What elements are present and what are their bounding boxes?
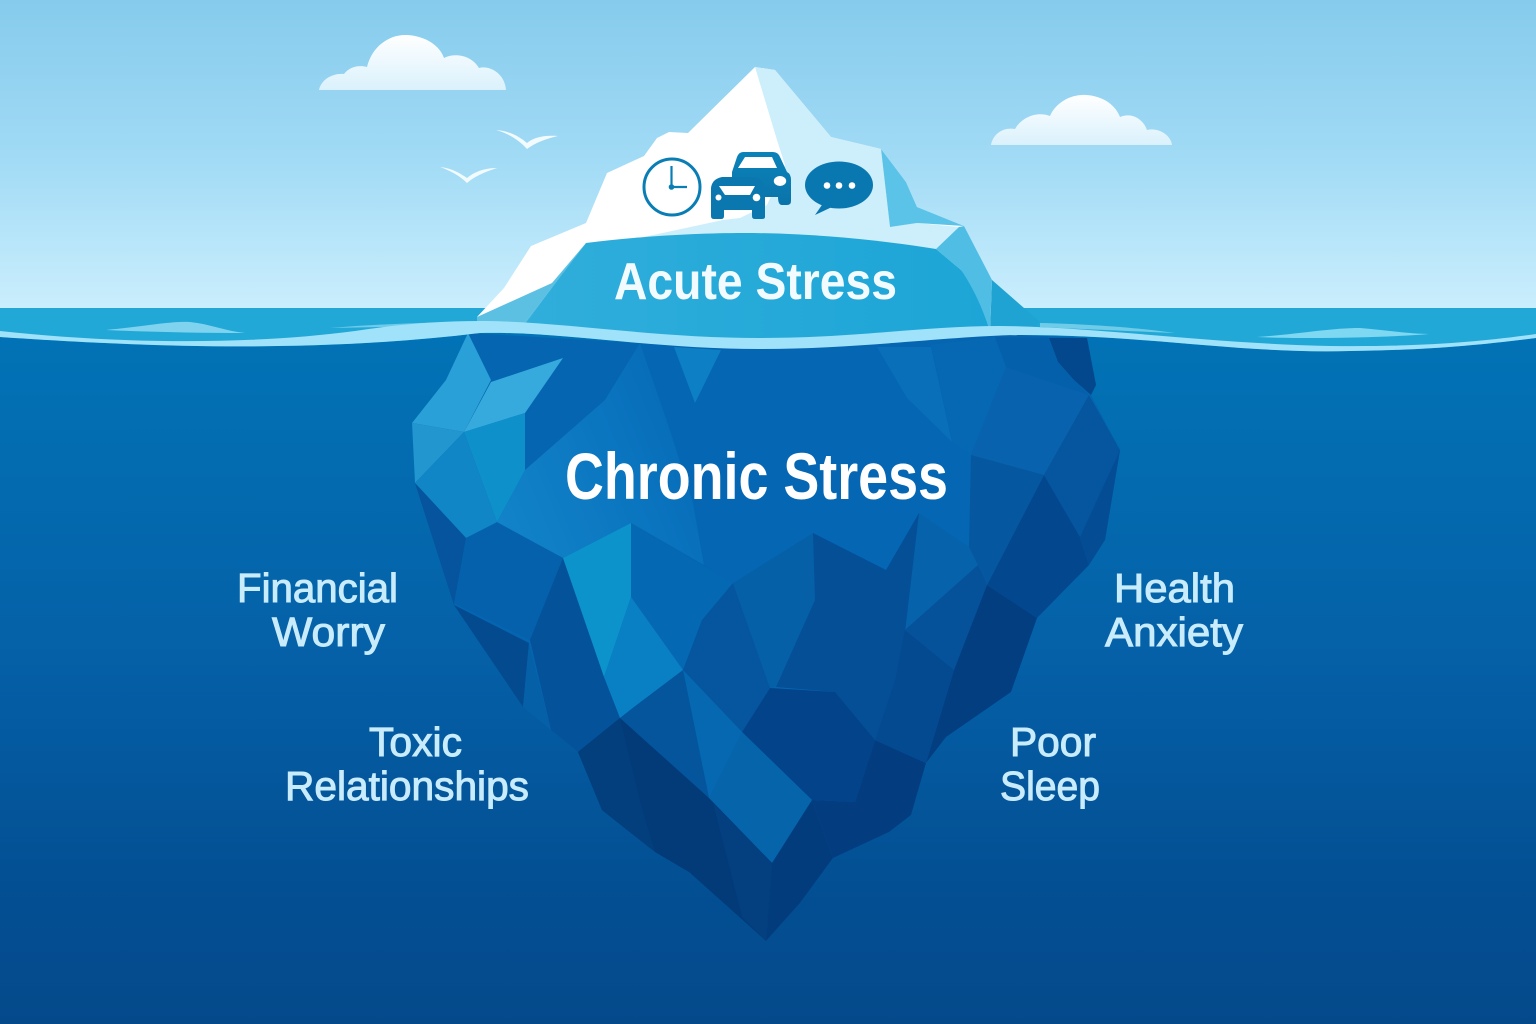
sea surface [0, 308, 1536, 356]
label: Toxic Relationships: Relationships [285, 763, 529, 809]
label: Health Anxiety: Anxiety [1105, 609, 1244, 655]
label: Financial Worry [237, 565, 398, 655]
deep ocean [0, 333, 1536, 1024]
back car [732, 152, 791, 210]
cloud: right [991, 95, 1172, 145]
label: Poor Sleep: Poor [1010, 719, 1096, 765]
waterline wave [0, 321, 1536, 351]
label: Health Anxiety [1105, 565, 1244, 655]
front car [711, 177, 765, 219]
iceberg: submerged body [412, 333, 1120, 941]
iceberg tip [477, 67, 1040, 343]
label: Health Anxiety: Health [1114, 565, 1235, 611]
icon: cars [711, 152, 791, 219]
label: Poor Sleep: Sleep [1000, 763, 1100, 809]
cloud: left [319, 35, 506, 90]
tip: acute stress band [521, 233, 990, 343]
tip: blue facet [881, 149, 964, 227]
tip: white face [477, 67, 1030, 327]
sky background [0, 0, 1536, 308]
icon: speech bubble [805, 162, 873, 215]
bird: lower [440, 167, 497, 183]
label: Financial Worry: Financial [237, 565, 398, 611]
heading: Chronic Stress: Chronic Stress [565, 439, 948, 513]
label: Financial Worry: Worry [272, 609, 386, 655]
heading: Acute Stress: Acute Stress [614, 253, 897, 311]
bird: upper [496, 130, 558, 149]
tip: shaded right face [644, 67, 959, 249]
label: Toxic Relationships: Toxic [369, 719, 462, 765]
icon: clock [644, 159, 700, 215]
tip: light lower facets [936, 226, 992, 330]
label: Poor Sleep [1000, 719, 1100, 809]
label: Toxic Relationships [285, 719, 529, 809]
